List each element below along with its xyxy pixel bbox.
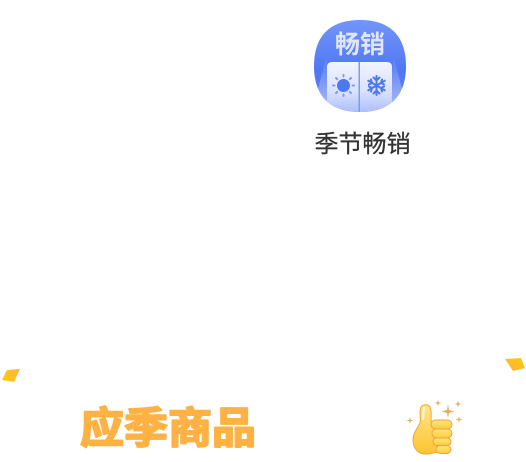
thumb hand <box>413 405 452 454</box>
icon title: 畅销 <box>335 31 385 59</box>
card divider <box>358 62 360 112</box>
heading: seasonal best sellers: 季节畅销 <box>314 131 410 158</box>
left card: sun <box>327 62 358 112</box>
right card: snowflake <box>360 62 392 112</box>
icon: thumbs up with sparkles <box>406 400 462 454</box>
icon: seasonal best-seller app icon <box>312 20 408 112</box>
decoration: left yellow chip <box>2 369 20 382</box>
decoration: right yellow chip <box>505 358 525 371</box>
heading: seasonal products: 应季商品 <box>80 406 256 453</box>
sparkles <box>406 400 462 424</box>
fingers <box>431 420 452 454</box>
